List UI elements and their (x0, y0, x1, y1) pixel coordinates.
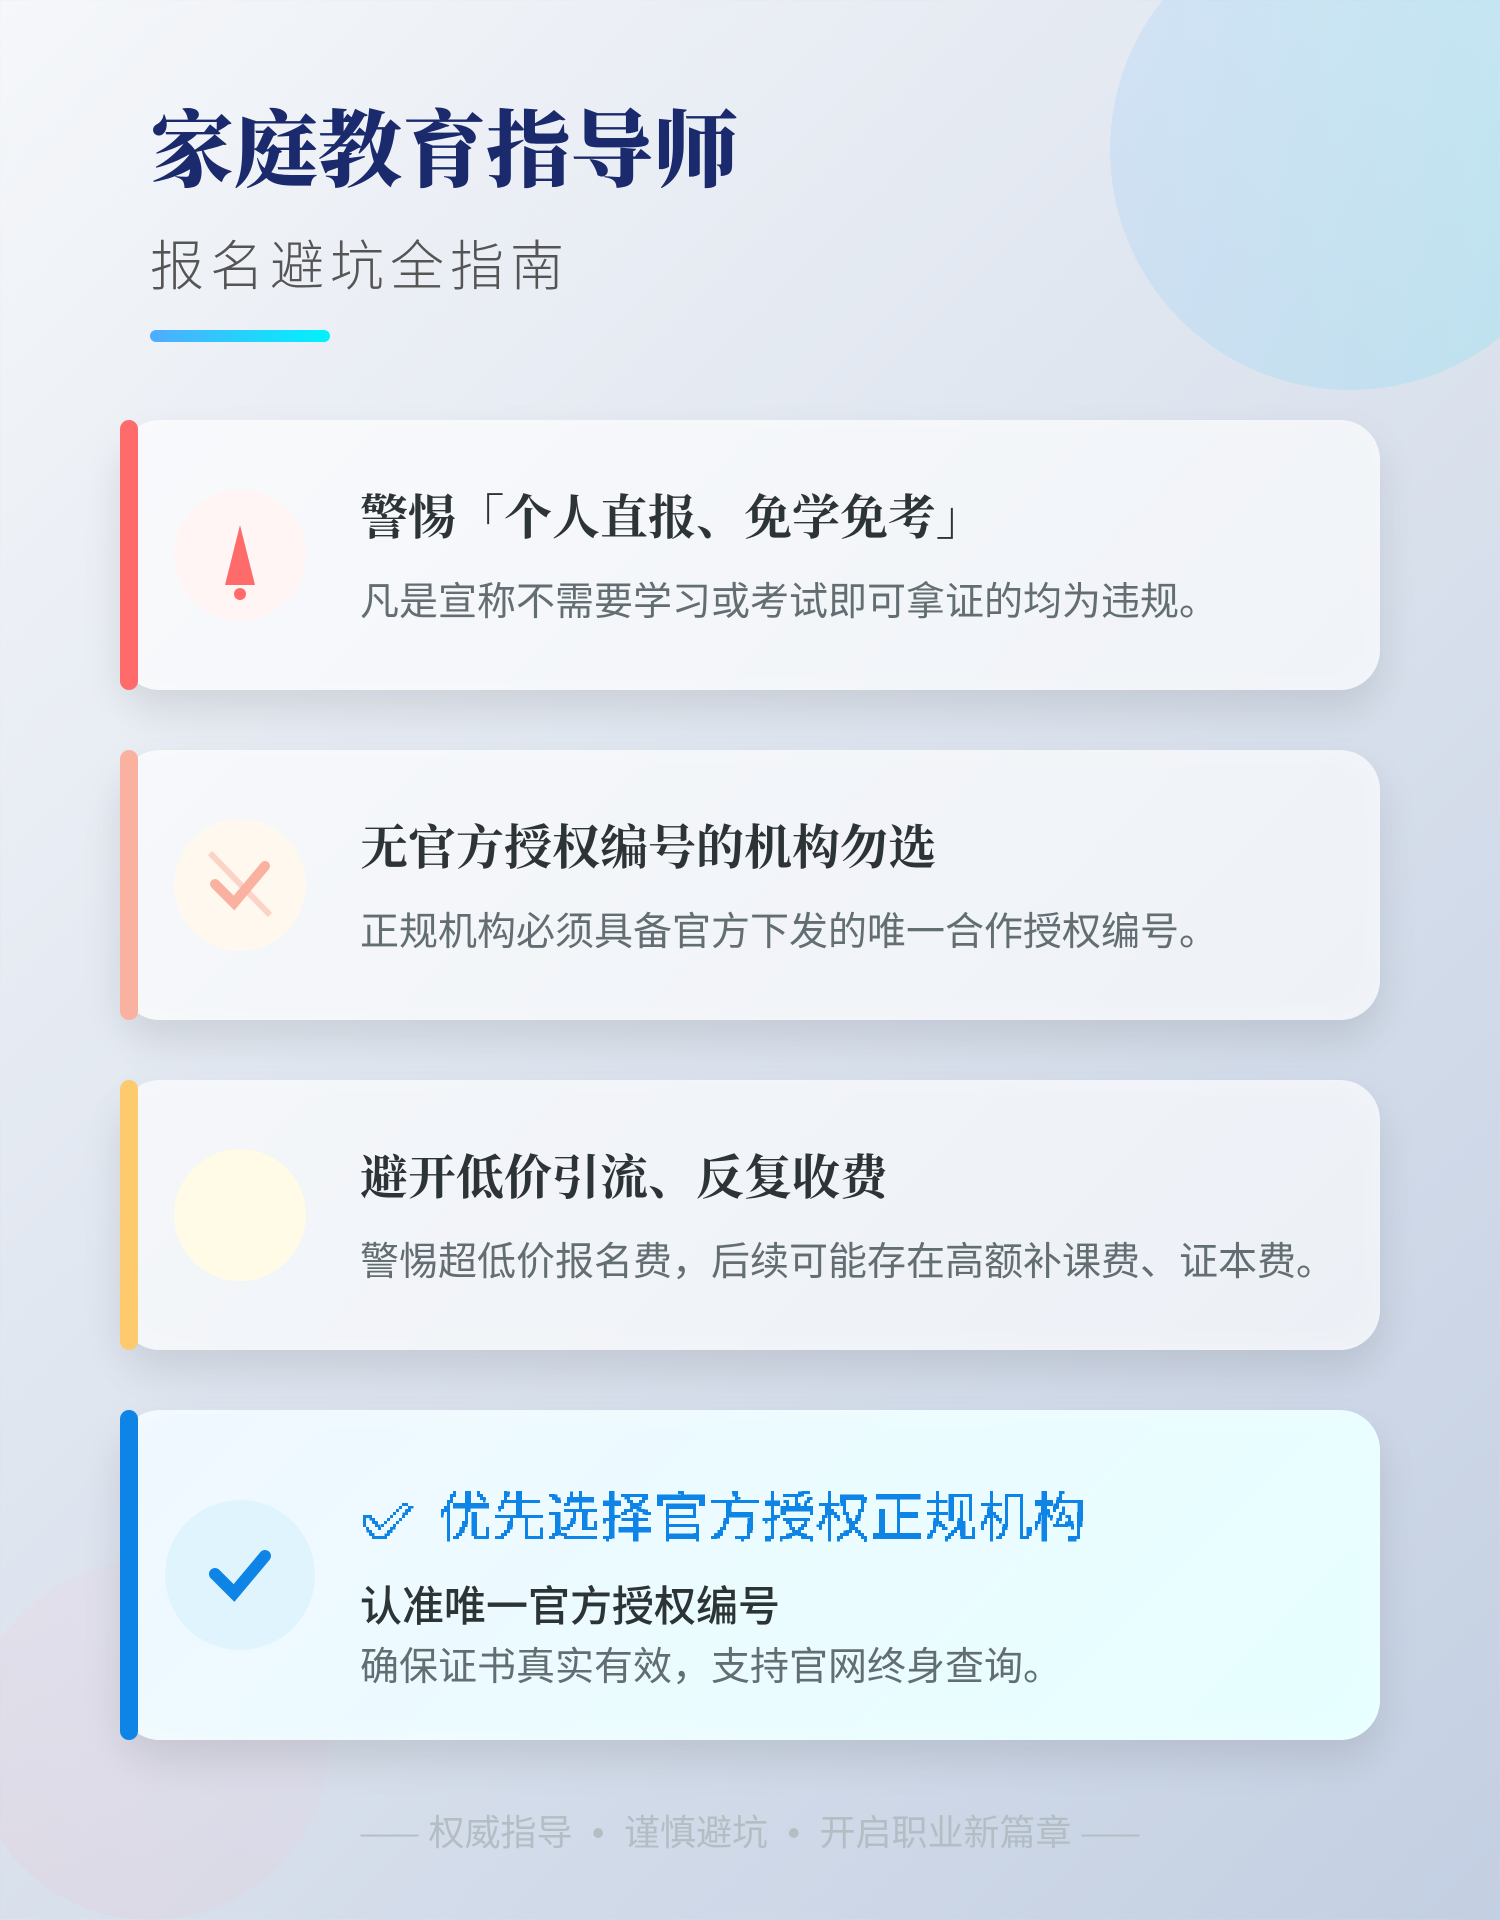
footer tagline: —— 权威指导 谨慎避坑 开启职业新篇章 —— (360, 1812, 1140, 1853)
card 1 accent bar (120, 420, 138, 690)
title accent bar (150, 330, 330, 342)
card 3 accent bar (120, 1080, 138, 1350)
footer tagline: • (592, 1812, 605, 1853)
card 3 heading: 避开低价引流、反复收费 (360, 1152, 888, 1205)
card 2 accent bar (120, 750, 138, 1020)
card 2 heading: 无官方授权编号的机构勿选 (360, 822, 936, 875)
card 4 heading: 优先选择官方授权正规机构 (438, 1473, 1086, 1552)
card 1 description: 凡是宣称不需要学习或考试即可拿证的均为违规。 (360, 581, 1218, 624)
card 1 heading: 警惕「个人直报、免学免考」 (360, 492, 984, 545)
footer tagline: • (787, 1812, 800, 1853)
card 3 description: 警惕超低价报名费，后续可能存在高额补课费、证本费。 (360, 1241, 1335, 1284)
card 4 subheading: 认准唯一官方授权编号 (360, 1583, 780, 1630)
subtitle: 报名避坑全指南 (150, 237, 570, 297)
panel: warning card 1 (112, 420, 1388, 718)
card 2 description: 正规机构必须具备官方下发的唯一合作授权编号。 (360, 911, 1218, 954)
card 4 accent bar (120, 1410, 138, 1740)
panel: warning card 2 (112, 750, 1388, 1048)
icon: crossed check (174, 819, 306, 951)
decorative circle: top right (1110, 0, 1500, 390)
decorative circle: bottom left (0, 1560, 330, 1920)
panel: recommendation card (112, 1410, 1388, 1768)
title: 家庭教育指导师 (150, 106, 738, 199)
panel: warning card 3 (112, 1080, 1388, 1378)
icon: empty circle (174, 1149, 306, 1281)
icon: check mark (165, 1500, 315, 1650)
card 4 description: 确保证书真实有效，支持官网终身查询。 (360, 1646, 1062, 1689)
icon: warning triangle (212, 525, 306, 621)
